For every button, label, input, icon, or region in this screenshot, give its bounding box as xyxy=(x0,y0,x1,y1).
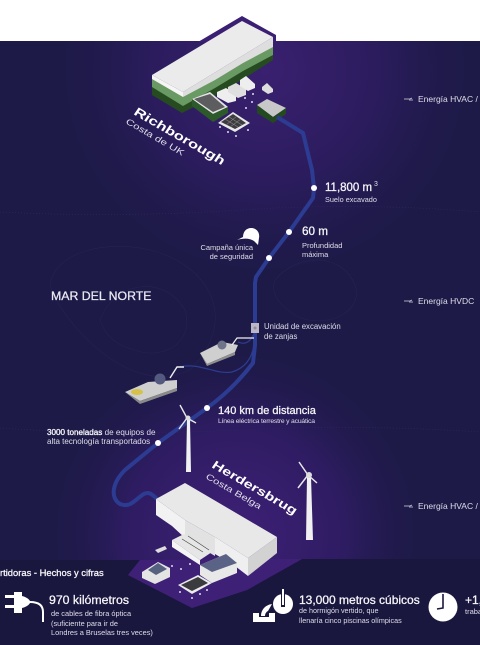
stat: soil excavated: 3 xyxy=(374,181,378,188)
stat: tonnes transported xyxy=(47,428,156,446)
green middle band xyxy=(152,46,273,106)
transformer pad xyxy=(192,92,228,114)
stat: tonnes transported: 3000 toneladas de equipos de xyxy=(47,428,156,437)
stat: soil excavated: 11,800 m xyxy=(325,182,372,194)
note: safety campaign: Campaña única xyxy=(200,243,254,252)
note: safety campaign: de seguridad xyxy=(210,252,253,261)
label: Richborough: Costa de UK xyxy=(124,117,186,158)
stat: tonnes transported: alta tecnología transportados xyxy=(47,437,150,446)
legend: HVAC bottom: Energía HVAC / xyxy=(418,501,478,511)
stat: concrete: 13,000 metros cúbicos xyxy=(299,593,420,607)
heading: facts and figures: rtidoras - Hechos y cifras xyxy=(0,567,104,578)
icon: trenching unit xyxy=(251,323,259,333)
stat: fibre cable: 970 kilómetros xyxy=(49,593,129,607)
grid panel xyxy=(178,575,212,594)
dark green base xyxy=(152,50,273,113)
converter station: Richborough xyxy=(152,21,286,137)
ship 2 xyxy=(125,367,184,404)
ship 1 xyxy=(200,338,254,366)
legend: HVAC top: Energía HVAC / xyxy=(418,94,478,104)
note: trenching unit: de zanjas xyxy=(264,332,297,341)
icon: plug xyxy=(5,592,43,622)
ship cable links xyxy=(179,335,254,372)
label: Richborough: Richborough xyxy=(131,106,228,168)
stat: fibre cable: (suficiente para ir de xyxy=(51,619,118,628)
headland: Herdersbrug ground xyxy=(128,559,302,608)
stat: fibre cable: de cables de fibra óptica xyxy=(51,609,132,618)
stat: distance: Línea eléctrica terrestre y acuática xyxy=(218,418,315,425)
icon: clock xyxy=(428,592,458,622)
connection dots xyxy=(219,93,254,137)
building roof xyxy=(152,21,273,92)
stat: soil excavated xyxy=(325,181,378,204)
transformer block xyxy=(257,99,286,117)
building roof xyxy=(156,483,277,558)
stat: distance xyxy=(218,405,317,425)
stat: concrete xyxy=(299,593,420,625)
bottom facts panel background xyxy=(0,559,480,645)
stat: depth: Profundidad xyxy=(302,241,342,250)
icon: safety helmet xyxy=(237,228,259,245)
outdoor block xyxy=(142,562,170,584)
icon: concrete pour xyxy=(253,589,293,622)
rectifier units xyxy=(217,88,236,103)
markers on cable xyxy=(155,185,317,446)
wind turbine left xyxy=(179,405,196,472)
building walls xyxy=(156,499,185,538)
grid panel xyxy=(218,112,250,132)
stat: depth: máxima xyxy=(302,250,329,259)
stat: depth: 60 m xyxy=(302,225,328,238)
converter station: Herdersbrug xyxy=(142,483,277,599)
stat: fibre cable: Londres a Bruselas tres veces) xyxy=(51,628,153,637)
heading: North Sea: MAR DEL NORTE xyxy=(51,289,151,303)
stat: soil excavated: Suelo excavado xyxy=(325,195,377,204)
connection dots xyxy=(171,563,208,599)
stat: fibre cable xyxy=(49,593,153,637)
stat: concrete: llenaría cinco piscinas olímpicas xyxy=(299,616,402,625)
headland: Richborough outline xyxy=(198,16,276,42)
small unit xyxy=(262,83,273,94)
note: safety campaign xyxy=(200,243,254,261)
label: Herdersbrug: Costa Belga xyxy=(204,472,263,512)
stat: concrete: de hormigón vertido, que xyxy=(299,606,379,615)
stat: hours worked xyxy=(465,593,480,616)
wind turbine right xyxy=(298,462,317,540)
building side faces xyxy=(152,75,183,97)
legend: HVDC: Energía HVDC xyxy=(418,296,474,306)
stat: distance: 140 km de distancia xyxy=(218,405,317,417)
HVDC cable route xyxy=(114,117,314,505)
note: trenching unit: Unidad de excavación xyxy=(264,322,341,331)
converter units xyxy=(172,534,212,560)
note: trenching unit xyxy=(264,322,341,341)
pad: transformer xyxy=(200,554,237,583)
small unit xyxy=(155,546,167,553)
label: Herdersbrug: Herdersbrug xyxy=(210,458,300,517)
stat: depth xyxy=(302,225,342,259)
